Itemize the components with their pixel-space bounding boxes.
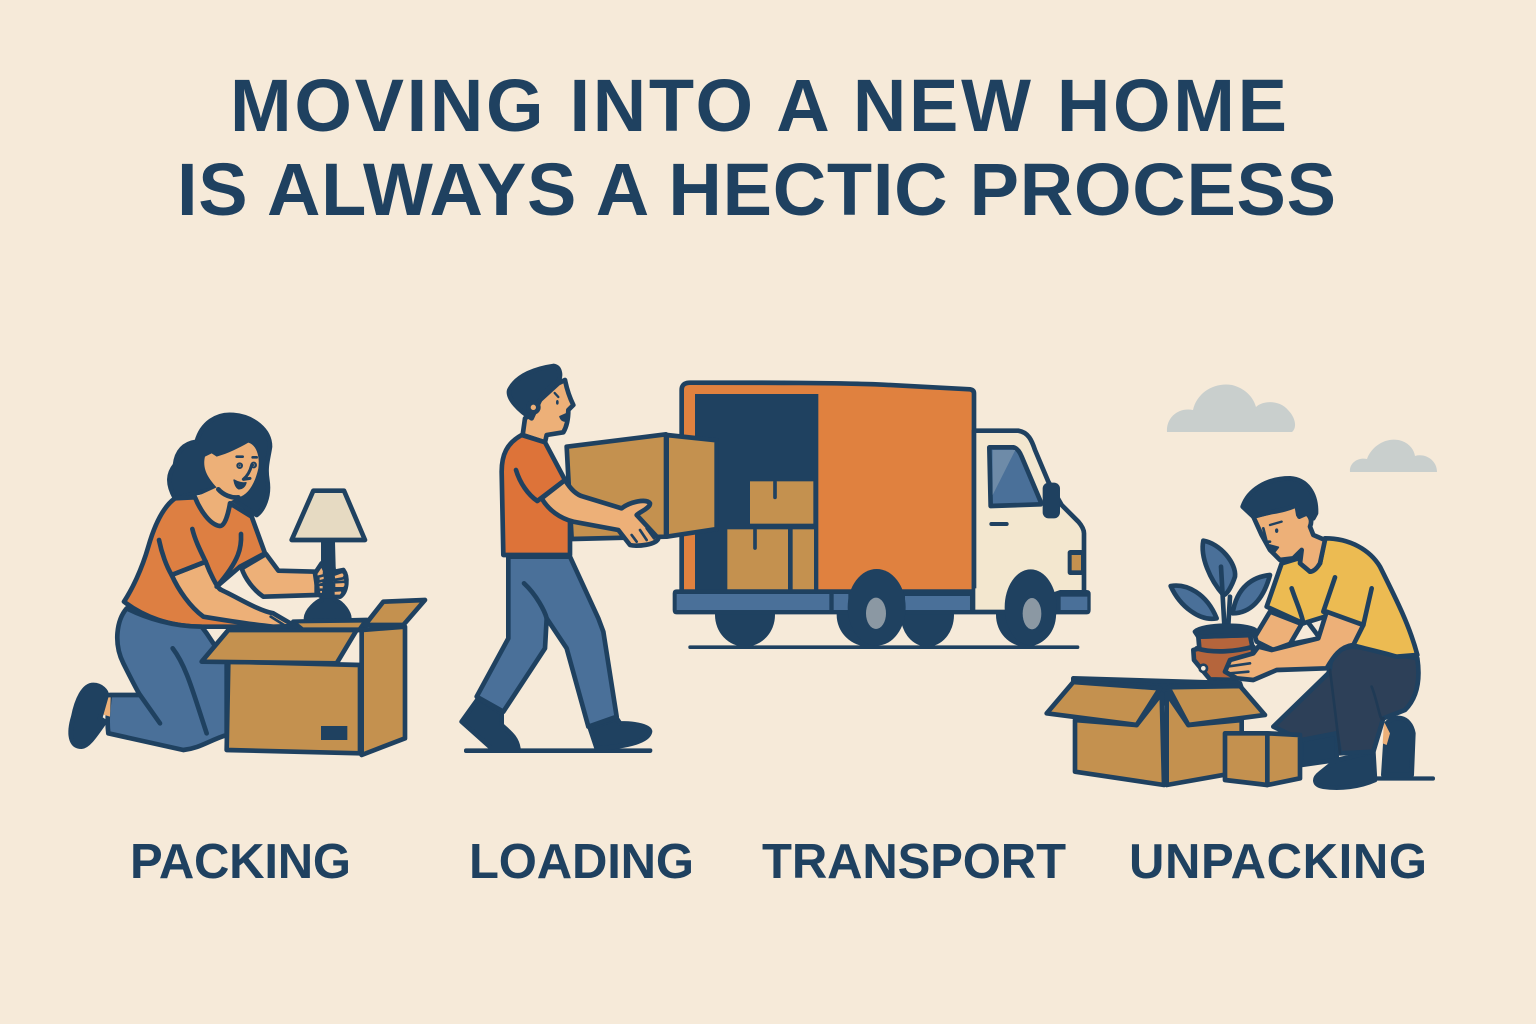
label: loading: LOADING: [469, 835, 694, 889]
shirt: [124, 497, 273, 627]
upper wheels and hubs: [848, 569, 1057, 646]
lamp: [292, 491, 365, 618]
stacked boxes in truck: [727, 481, 814, 589]
chassis: [673, 588, 1091, 614]
sleeve seam: [516, 470, 565, 501]
open cargo door: [695, 394, 818, 591]
face details: [555, 393, 567, 421]
hair: [169, 415, 270, 515]
neck and face: [523, 380, 573, 442]
mirror: [1043, 483, 1060, 518]
front shoe: [590, 718, 650, 748]
label: transport: TRANSPORT: [762, 835, 1066, 889]
open box: [1047, 678, 1265, 785]
illustration: delivery truck: [673, 383, 1091, 649]
trousers: [477, 557, 617, 727]
small box: [1225, 733, 1300, 785]
near arm: [172, 562, 295, 627]
cab: [974, 431, 1084, 612]
cloud small: [1350, 440, 1437, 472]
door handle: [989, 522, 1009, 526]
gap between arms: [1290, 618, 1320, 644]
title: [177, 64, 1336, 231]
lower leg: [1302, 733, 1337, 765]
shirt: [1267, 538, 1417, 657]
label: unpacking: UNPACKING: [1129, 835, 1427, 889]
ground line: [688, 645, 1079, 649]
ankle: [99, 697, 111, 717]
hair: [1243, 478, 1316, 518]
facial features: [218, 457, 257, 498]
rear shoe: [462, 698, 518, 748]
hair: [509, 366, 560, 418]
window: [989, 447, 1041, 506]
hand on lamp: [315, 560, 346, 598]
ground line: [1375, 776, 1435, 781]
face and neck: [195, 443, 259, 527]
face details: [1263, 522, 1282, 552]
trousers: [1273, 647, 1418, 753]
illustration: man unpacking a plant: [1047, 478, 1435, 788]
ankle: [1383, 722, 1390, 745]
title: MOVING INTO A NEW HOME: [230, 64, 1287, 147]
plant leaves: [1171, 541, 1270, 625]
title: IS ALWAYS A HECTIC PROCESS: [177, 148, 1336, 231]
far arm: [1255, 612, 1302, 650]
trousers: [108, 608, 227, 750]
ear: [528, 402, 538, 412]
lower wheels: [715, 583, 1056, 647]
cargo body: [682, 383, 974, 592]
headlight: [1068, 550, 1084, 575]
open cardboard box: [202, 600, 425, 755]
sleeve seams: [1292, 577, 1372, 625]
carried box: [567, 434, 717, 539]
near arm and hand: [1225, 612, 1363, 680]
rear shoe: [1383, 718, 1413, 775]
ground line: [464, 748, 652, 753]
sleeve seam: [159, 529, 206, 575]
far arm: [242, 554, 317, 597]
shirt: [502, 435, 570, 555]
illustration: woman packing a lamp into a box: [71, 415, 425, 755]
illustration: man carrying a box: [462, 366, 717, 753]
cloud large: [1167, 384, 1295, 432]
ground line: loading: [464, 749, 652, 753]
label: packing: PACKING: [130, 835, 351, 889]
front shoe: [1315, 752, 1375, 788]
face and neck: [1253, 505, 1325, 572]
arm and hand: [542, 480, 658, 546]
plant pot: [1193, 626, 1255, 680]
shoe: [71, 685, 107, 747]
